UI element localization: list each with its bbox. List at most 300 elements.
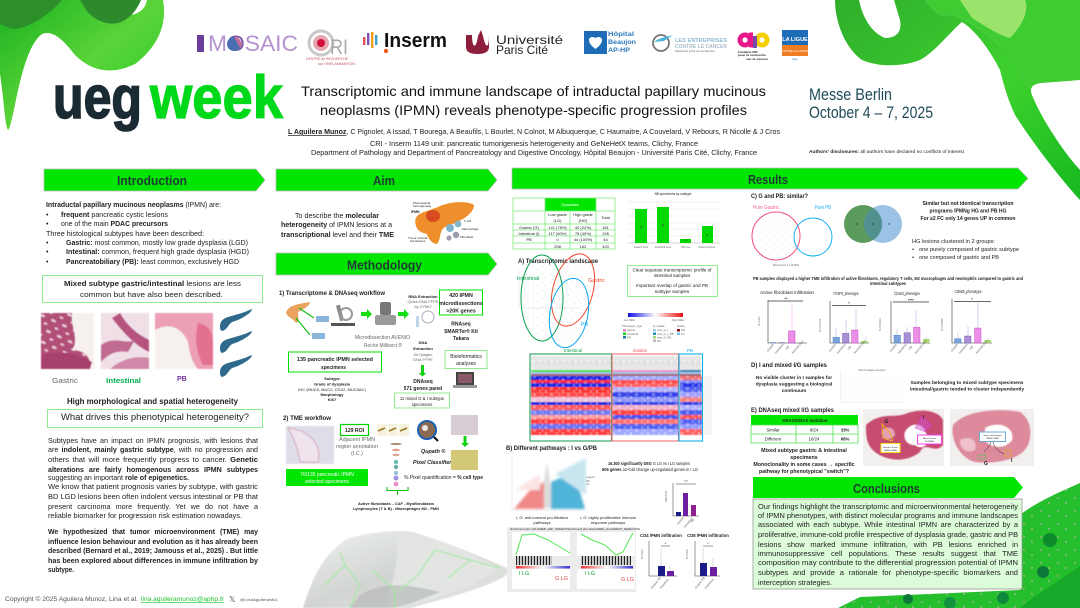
- heading: methodology: Methodology: [347, 258, 422, 272]
- label: DNA extraction: Extraction: [413, 346, 433, 351]
- text: similar programs: Similar but not identical transcription: [922, 201, 1014, 207]
- table: dysplasia: 162: [580, 244, 587, 249]
- label: Qupath: [413, 448, 454, 466]
- callout: 420 IPMN: microdissections: [439, 301, 483, 307]
- heading: aim: [276, 169, 497, 191]
- heatmap legend: LG: [681, 332, 685, 336]
- label: RNA extraction: Quick-RNA FFPE: [407, 299, 439, 304]
- chart: CD66b: CD66b_phenotype: [954, 289, 982, 294]
- callout: mixed subtype: common but have also been described.: [80, 290, 223, 299]
- label: RNA extraction: by ZYMO: [415, 304, 431, 309]
- panel: introduction: [41, 169, 265, 574]
- heatmap legend: Phenotype_type: [622, 324, 643, 328]
- logo: Fondation ARC: [738, 32, 770, 61]
- chart: active fibroblast infiltration: % CAF: [757, 316, 761, 326]
- list: subtype markers: IHC (MUC6, MUC2, CDX2, MUC5AC): [298, 387, 366, 392]
- text: monoclonality: Mixed subtype gastric & intestinal: [761, 448, 847, 454]
- chart: FOXP3: Intestinal: [836, 343, 847, 355]
- chart: CD66b: *: [971, 297, 973, 302]
- heatmap legend: gastric: [627, 328, 636, 332]
- text: similar programs: [920, 201, 1016, 222]
- icon: microdissection instrument: [375, 302, 396, 325]
- chart: CD66b: PB: [969, 345, 974, 351]
- text block: prognosis: reliable biomarker for progression risk estimation nowadays.: [48, 512, 242, 520]
- text: HG clusters: [912, 239, 1019, 261]
- text block: IPMN definition: Three histological subtypes have been described:: [46, 230, 204, 238]
- table: dysplasia: 44 (100%): [574, 237, 593, 242]
- panel: conclusions: [753, 477, 1023, 589]
- chart: MKI67 bars: Gastric: [676, 515, 685, 526]
- footer: copyright: Copyright © 2025 Aguilera Munoz, Lina et al.: [5, 595, 138, 603]
- chart: GSEA plot 2: Enrichment plot: HALLMARK_ALLOGRAFT_REJECTION: [568, 527, 640, 531]
- text: DEG counts: 606 genes ≥2-fold change up-regulated genes in I LG: [602, 467, 698, 472]
- text block: hypothesis: We hypothesized that tumor microenvironment (TME) may: [48, 528, 258, 536]
- chart: transcriptomic UMAP: Gastric: [588, 278, 605, 284]
- chart: CD66b: % CD66b: [940, 318, 944, 331]
- table: dysplasia: (LG): [554, 218, 562, 223]
- decorative liver: [303, 531, 508, 608]
- icon: tube and RNA: [416, 311, 434, 327]
- chart: GSEA plot 1: [507, 527, 572, 592]
- table: KRAS/GNAS: 66%: [841, 436, 849, 442]
- illustration: pancreas and TME: Macrophage: [462, 227, 479, 231]
- callout: clear separation: [628, 266, 718, 296]
- table: dysplasia: (HG): [579, 218, 588, 223]
- table: dysplasia: Intestinal (I): [519, 231, 540, 236]
- panel: results: [506, 168, 1034, 592]
- venue and dates: Messe Berlin: [809, 86, 892, 104]
- disclosures: Authors' disclosures: all authors have declared no conflicts of interest: [809, 149, 965, 155]
- logo: Inserm: Inserm: [384, 30, 447, 52]
- heatmap group labels: Intestinal: [564, 348, 582, 353]
- table: dysplasia: Dysplasia: [561, 202, 579, 207]
- image: gastric histology: [41, 313, 94, 369]
- chart: gastric vs PB scatter: Pure Gastric: [753, 205, 779, 211]
- chart: active fibroblast infiltration: PB: [785, 345, 790, 351]
- table: KRAS/GNAS: Different: [765, 436, 782, 442]
- table: KRAS/GNAS: 8/24: [810, 428, 819, 432]
- chart: gastric vs PB scatter: [752, 205, 832, 267]
- text: PB TME: intestinal subtypes: [870, 281, 907, 286]
- decorative green shape: top right: [835, 0, 1080, 200]
- heatmap legend: PB: [627, 335, 631, 339]
- logo: CRI: CENTRE de RECHERCHE: [306, 57, 348, 61]
- label: RNAseq: Takara: [453, 336, 469, 342]
- heatmap legend: intestinal: [627, 332, 638, 336]
- workflow 1: transcriptome and DNAseq: [279, 290, 487, 408]
- text block: IPMN definition: •: [46, 258, 49, 266]
- text block: prognosis: We know that patient prognosis varies by subtype, with gastric: [48, 483, 258, 491]
- heatmap legend: new_G_PB: [657, 335, 671, 339]
- table: KRAS/GNAS: KRAS/GNAS mutation: [782, 418, 828, 423]
- authors and affiliations: [288, 127, 780, 157]
- chart: FOXP3: *: [848, 301, 850, 306]
- label: annotation: [336, 437, 378, 457]
- chart: FOXP3: FOXP3_phenotype: [834, 291, 859, 296]
- heading: results: [512, 168, 1028, 189]
- label: Qupath: Pixel Classifiers: [413, 460, 454, 466]
- text block: aim: heterogeneity of IPMN lesions at a: [281, 220, 393, 229]
- text: HG clusters: •: [912, 247, 914, 253]
- table: dysplasia: 420: [602, 244, 610, 249]
- text block: prognosis: are indolent, mainly gastric subtype, with no progression and: [48, 446, 258, 454]
- heatmap legend: HG: [681, 328, 685, 332]
- table: dysplasia: PB: [526, 237, 532, 242]
- callout: clear separation: intestinal samples: [654, 273, 691, 278]
- chart: CD163: % CD163: [878, 318, 882, 331]
- chart: MKI67 bars: [664, 480, 699, 529]
- chart: venn diagram: [844, 205, 902, 243]
- logo: ueg week: [53, 64, 284, 131]
- image: mixed specimen tissue 1: KI-GNAS: [925, 440, 935, 443]
- chart: gastric vs PB scatter: Dimension 1 (16.8%): [773, 263, 799, 267]
- chart: CD66b: Gastric: [950, 342, 959, 353]
- venue and dates: October 4 – 7, 2025: [809, 104, 933, 122]
- table: dysplasia: 40 (22%): [575, 225, 592, 230]
- chart: active fibroblast infiltration: Gastric: [766, 342, 775, 353]
- footer: copyright: @LinaAguileraMu1: [240, 598, 278, 602]
- callout: 76/135: selected specimens: [305, 479, 349, 485]
- callout: 135 specimens: 135 pancreatic IPMN selected: [297, 357, 373, 363]
- footer: copyright: [5, 595, 278, 604]
- label: DNAseq: DNAseq: [413, 379, 433, 385]
- text block: prognosis: BD LGD lesions been often indolent versus intestinal or PB that: [48, 493, 258, 501]
- text: PB TME: PB samples displayed a higher TME infiltration of active fibroblasts, regulatory T cells, M2 macrophages and neutrophils compared to gastric and: [753, 276, 1023, 281]
- callout: clear separation: subtype samples: [655, 289, 690, 294]
- label: cell types: Active fibroblasts – CAF - Myofibroblasts: [358, 501, 435, 506]
- image: mixed specimen tissue 1: Mixed G lesion: [883, 447, 899, 449]
- decorative green shape: top left: [0, 0, 164, 130]
- callout: bioinformatics: Bioinformatics: [450, 354, 482, 360]
- heading: heterogeneity: High morphological and spatial heterogeneity: [67, 397, 239, 406]
- authors and affiliations: L Aguilera Munoz, C Pignolet, A Issad, T Bourega, A Beaufils, L Bourlet, N Colnot, M Albuquerque, C Haumaitre, A Couvelard, V Rebours, R Nicolle & J Cros: [288, 127, 780, 136]
- logo: CRI: sur l'INFLAMMATION: [318, 62, 355, 66]
- chart: GSEA plot 2: [568, 527, 640, 592]
- logo: Université Paris Cité: Université: [496, 33, 563, 47]
- image: intestinal histology: [101, 313, 149, 369]
- callout: 420 IPMN: [439, 290, 483, 315]
- table: KRAS/GNAS: 16/24: [809, 436, 820, 442]
- logo: Les entreprises contre le cancer: Mécénat pour la recherche: [675, 49, 716, 53]
- label: DNA extraction: [413, 340, 433, 362]
- logo: CRI: RI: [330, 36, 348, 59]
- GSEA captions: I, G: highly proliferative immune: [580, 515, 637, 520]
- heatmap legend: low DEG: [624, 318, 635, 322]
- text block: IPMN definition: Gastric: most common, mostly low grade dysplasia (LGD): [66, 239, 248, 247]
- logo: Les entreprises contre le cancer: LES ENTREPRISES: [675, 38, 727, 44]
- text: PB TME: [753, 276, 1023, 286]
- table: dysplasia: 181: [602, 225, 610, 230]
- chart: volcano plot: Legend: [586, 475, 595, 479]
- text: cluster independently: intestinal/gastric tended to cluster independently: [910, 386, 1024, 392]
- heatmap group labels: PB: [687, 348, 693, 353]
- callout: 135 specimens: [288, 352, 382, 372]
- chart: active fibroblast infiltration: **: [784, 296, 788, 302]
- list: subtype markers: Ki67: [328, 397, 337, 402]
- chart: GSEA plot 1: G LG: [555, 576, 568, 582]
- chart: specimens by subtype: Intestinal pure: [655, 245, 672, 249]
- icons: pancreas silhouettes: [220, 309, 252, 377]
- logo: Hôpital Beaujon: Hôpital: [608, 32, 634, 38]
- label: RNAseq: SMARTer® Kit: [444, 328, 478, 335]
- chart: GSEA plot 1: I LG: [519, 571, 529, 577]
- label: cell types: Lymphocytes (T & B) - Macrophages M2 - PMN: [353, 506, 439, 511]
- logo: Fondation ARC: pour la recherche: [738, 53, 766, 57]
- label: microdissection: Roche Millisect ®: [364, 342, 402, 349]
- text block: prognosis: alterations are fairly homogenous across IPMN subtypes: [48, 466, 258, 474]
- image: mixed specimen tissue 2: [950, 409, 1034, 467]
- authors and affiliations: CRI - Inserm 1149 unit: pancreatic tumorigenesis heterogeneity and GeNeHetX teams, Clichy, France: [370, 139, 698, 148]
- icon: magnifier: [418, 421, 438, 441]
- image: classified tile: [451, 450, 478, 470]
- list: subtype markers: Subtype: [324, 376, 341, 381]
- chart: CD163: ****: [908, 298, 915, 302]
- chart: CD4 infiltration: Intestinal: [659, 578, 670, 590]
- workflow 1: transcriptome and DNAseq: 1) Transcriptome & DNAseq workflow: [279, 290, 385, 297]
- callout: 129 ROI: [340, 424, 368, 436]
- chart: FOXP3: Normal Duct: [853, 339, 867, 355]
- chart: CD8 infiltration: CD8 /PMN infiltration: [687, 533, 729, 538]
- chart: transcriptomic UMAP: Intestinal: [517, 276, 539, 282]
- GSEA captions: I, G: anti-tumoral pro-filtration: [516, 515, 568, 520]
- chart: specimens by subtype: NB specimens by subtype: [655, 192, 692, 196]
- text: no cluster: No visible cluster in I samples for: [756, 375, 832, 381]
- chart: GSEA plot 2: G LG: [621, 577, 634, 583]
- text block: prognosis: Subtypes have an impact on IPMN prognosis, with lesions that: [48, 437, 258, 445]
- table: dysplasia: Total: [601, 215, 610, 220]
- GSEA captions: response pathways: [591, 520, 625, 525]
- callout: 76/135: 76/135 pancreatic IPMN: [300, 472, 354, 478]
- text block: IPMN definition: Intestinal: common, frequent high grade dysplasia (HGD): [66, 248, 249, 256]
- chart: CD8 infiltration: *: [707, 541, 709, 546]
- chart: CD8 infiltration: % CD8: [685, 549, 689, 559]
- chart: mixed samples scatter: Mixed subtype samples: [858, 368, 886, 372]
- chart: mixed samples scatter: [841, 368, 905, 402]
- text: no cluster: [756, 375, 832, 394]
- table: KRAS/GNAS: 33%: [841, 428, 849, 432]
- text block: conclusions: associated with each subtype. While intestinal IPMN are characterized by a: [758, 521, 1018, 529]
- chart: transcriptomic UMAP: PB: [581, 322, 588, 328]
- text block: hypothesis: has been explored about differences in immune infiltration by: [48, 557, 258, 565]
- image: mixed specimen tissue 1: Mixed I lesion: [923, 438, 937, 440]
- list: subtype markers: Morphology: [321, 392, 344, 397]
- text block: IPMN definition: •: [46, 220, 49, 228]
- chart: FOXP3: Gastric: [828, 342, 837, 353]
- callout: clear separation: Clear separate transcriptomic profile of: [633, 268, 712, 272]
- label: DNA extraction: Kit Qiagen: [414, 352, 432, 357]
- callout: mixed subtype: [42, 276, 262, 302]
- chart: specimens by subtype: Mixed subtype: [699, 245, 716, 249]
- callout: question: [48, 410, 262, 428]
- chart: volcano plot: NS: [586, 479, 590, 483]
- chart: specimens by subtype: Gastric pure: [634, 245, 649, 249]
- text block: conclusions: Our findings highlight the transcriptomic and microenvironmental heterogeneity: [758, 503, 1018, 511]
- text block: IPMN definition: [46, 201, 249, 266]
- callout: 129 ROI: 129 ROI: [345, 428, 365, 434]
- image: mixed specimen tissue 1: G: [884, 419, 888, 425]
- callout: mixed subtype: Mixed subtype gastric/intestinal lesions are less: [64, 279, 241, 288]
- label: annotation: (I.C.): [351, 451, 363, 457]
- heading: A: A) Transcriptomic landscape: [518, 258, 598, 265]
- label: DNAseq: 571 genes panel: [404, 386, 443, 392]
- chart: CD8 infiltration: [685, 533, 729, 590]
- text: monoclonality: specimens: [790, 455, 818, 461]
- chart: CD163: CD163_phenotype: [894, 291, 920, 296]
- table: KRAS/GNAS: Similar: [766, 428, 780, 432]
- icon: microscope: [331, 305, 355, 326]
- labels: subtypes: Gastric: [52, 376, 78, 385]
- icons: cell types: [390, 443, 402, 486]
- chart: CD163: Normal Duct: [914, 339, 928, 355]
- logo: MOSAIC: MOSAIC: [208, 31, 298, 56]
- callout: 420 IPMN: 420 IPMN: [449, 293, 473, 299]
- table: dysplasia: [513, 198, 615, 249]
- heatmap group labels: Gastric: [633, 348, 648, 353]
- text: DEG counts: 16.300 significantly DEG G LG vs I LG samples: [608, 461, 691, 466]
- chart: CD163: [878, 291, 930, 355]
- text block: aim: transcriptional level and their TME: [281, 230, 394, 239]
- chart: CD4 infiltration: [640, 533, 682, 590]
- illustration: pancreas and TME: T cell: [464, 219, 471, 223]
- text block: conclusions: proliferative, immune-cold profile irrespective of dysplasia grade, gastric and PB: [758, 531, 1018, 539]
- GSEA captions: [516, 515, 637, 525]
- footer: copyright: lina.aguileramunoz@aphp.fr: [141, 596, 225, 603]
- label: Qupath: Qupath ®: [421, 448, 445, 455]
- icon: laptop: [453, 372, 477, 388]
- chart: active fibroblast infiltration: [757, 290, 815, 355]
- panel: aim: [276, 169, 497, 244]
- text block: conclusions: immunosuppressive cell populations. These results suggest that TME: [758, 550, 1018, 558]
- image: annotated tissue: [286, 426, 334, 464]
- chart: transcriptomic UMAP: [517, 249, 605, 351]
- heading: C: C) G and PB: similar?: [751, 193, 808, 200]
- chart: MKI67 bars: PB: [690, 518, 695, 524]
- table: dysplasia: Low grade: [548, 212, 568, 217]
- callout: 420 IPMN: >20K genes: [446, 308, 476, 314]
- heading: aim: Aim: [373, 174, 395, 188]
- chart: CD163: PB: [908, 345, 913, 351]
- text block: aim: [281, 211, 394, 239]
- callout: bioinformatics: [445, 350, 487, 368]
- footer: copyright: 𝕏: [229, 595, 236, 604]
- logo: ueg week: ueg: [53, 64, 142, 131]
- heading: methodology: [276, 253, 497, 275]
- chart: CD163: Intestinal: [897, 343, 908, 355]
- label: RNA extraction: [407, 294, 439, 309]
- icon: pancreas with samples: [286, 302, 329, 339]
- logo: Hôpital Beaujon: Beaujon: [608, 40, 636, 46]
- logo: Inserm: [363, 30, 447, 53]
- heading: conclusions: [753, 477, 1023, 498]
- image: mixed specimen tissue 1: I: [923, 415, 925, 421]
- heatmap legend: new_G_I_PB: [657, 332, 674, 336]
- chart: FOXP3: [818, 291, 869, 355]
- heatmap legend: high DEG: [672, 318, 684, 322]
- chart: active fibroblast infiltration: Intestinal: [774, 343, 785, 355]
- text block: hypothesis: influence lesion behaviour and evolution as it has already been: [48, 538, 258, 546]
- text block: prognosis: [48, 437, 258, 520]
- chart: CD66b: Intestinal: [958, 343, 969, 355]
- logo: Hôpital Beaujon: AP-HP: [608, 48, 630, 54]
- table: dysplasia: 78 (40%): [575, 231, 592, 236]
- table: dysplasia: 117 (60%): [548, 231, 567, 236]
- heading: D: D) I and mixed I/G samples: [751, 362, 827, 369]
- heatmap legend: [622, 313, 685, 343]
- labels: subtypes: PB: [177, 376, 187, 383]
- chart: specimens by subtype: PB pure: [681, 245, 691, 249]
- text block: hypothesis: [48, 528, 258, 574]
- callout: clear separation: Important overlap of gastric and PB: [636, 283, 708, 288]
- label: DNA extraction: DNA: [419, 340, 427, 345]
- callout: question: What drives this phenotypical heterogeneity?: [61, 412, 249, 422]
- text block: hypothesis: described (Bernard et al., 2019; Jamouss et al., 2025) . But little: [48, 547, 258, 555]
- image: mixed specimen tissue 1: [863, 409, 944, 466]
- heatmap group labels: [564, 348, 693, 353]
- chart: FOXP3: % FOXP3: [818, 318, 822, 332]
- label: RNAseq: [444, 322, 478, 342]
- icons: slides: [377, 424, 409, 436]
- text block: conclusions: subtypes and provide a rationale for phenotype-specific biomarkers and: [758, 569, 1018, 577]
- illustration: pancreas and TME: heterogeneity: [413, 204, 432, 208]
- callout: mixed specimens: 11 mixed G & I subtype: [400, 396, 445, 401]
- text: monoclonality: [753, 448, 855, 475]
- logo: Hôpital Beaujon: [584, 31, 636, 54]
- chart: CD4 infiltration: % CD4: [640, 549, 644, 559]
- text: similar programs: For ≥2 FC only 14 genes UP in common: [920, 216, 1016, 222]
- heatmap legend: new_G_I: [657, 328, 668, 332]
- arrow: [398, 309, 409, 319]
- chart: FOXP3: PB: [847, 345, 852, 351]
- table: dysplasia: 141 (78%): [548, 225, 567, 230]
- logo: ueg week: week: [149, 64, 284, 131]
- text: no cluster: dysplasia suggesting a biological: [756, 382, 832, 388]
- chart: MKI67 bars: ****: [684, 480, 689, 484]
- chart: GSEA plot 1: Enrichment plot: HALLMARK_E2F_TARGETS: [510, 527, 568, 531]
- chart: CD66b: Normal Duct: [975, 339, 989, 355]
- heading: E: E) DNAseq mixed I/G samples: [751, 407, 834, 414]
- label: microdissection: [355, 335, 410, 349]
- table: dysplasia: 195: [602, 231, 610, 236]
- logo: La Ligue: [781, 30, 809, 61]
- text: cluster independently: Samples belonging to mixed subtype specimens: [910, 380, 1024, 386]
- table: dysplasia: 0: [556, 237, 559, 242]
- logo: Université Paris Cité: [466, 30, 563, 57]
- labels: subtypes: Intestinal: [106, 376, 141, 385]
- table: dysplasia: Gastric (G): [519, 225, 539, 230]
- logo: CRI: [306, 31, 355, 66]
- text block: prognosis: suggesting an important role of epigenetics.: [48, 474, 189, 482]
- table: KRAS/GNAS: [751, 415, 858, 443]
- text block: IPMN definition: Pancreatobiliary (PB): least common, exclusively HGD: [66, 258, 239, 266]
- illustration: pancreas and TME: IPMN: [411, 210, 420, 214]
- image: mixed specimen tissue 1: KRAS GNAS: [884, 449, 897, 452]
- heatmap legend: Grade: [677, 324, 685, 328]
- table: dysplasia: High grade: [573, 212, 594, 217]
- illustration: pancreas and TME: Tumor stromal: [408, 236, 428, 240]
- heatmap: [530, 348, 712, 441]
- logo: La Ligue: ligue: [792, 58, 798, 61]
- logo: Fondation ARC: Fondation ARC: [738, 50, 759, 54]
- chart: active fibroblast infiltration: Active fibroblast infiltration: [760, 290, 815, 295]
- list: subtype markers: [298, 376, 366, 402]
- labels: subtypes: [52, 376, 187, 385]
- text block: hypothesis: subtype.: [48, 566, 74, 574]
- callout: 135 specimens: specimens: [321, 365, 346, 371]
- text block: conclusions: of IPMN phenotypes, with distinct molecular programs and immune landscapes: [758, 512, 1018, 520]
- callout: bioinformatics: analyses: [456, 361, 476, 367]
- workflow 2: TME: 2) TME workflow: [283, 415, 332, 422]
- heatmap legend: NA: [657, 339, 661, 343]
